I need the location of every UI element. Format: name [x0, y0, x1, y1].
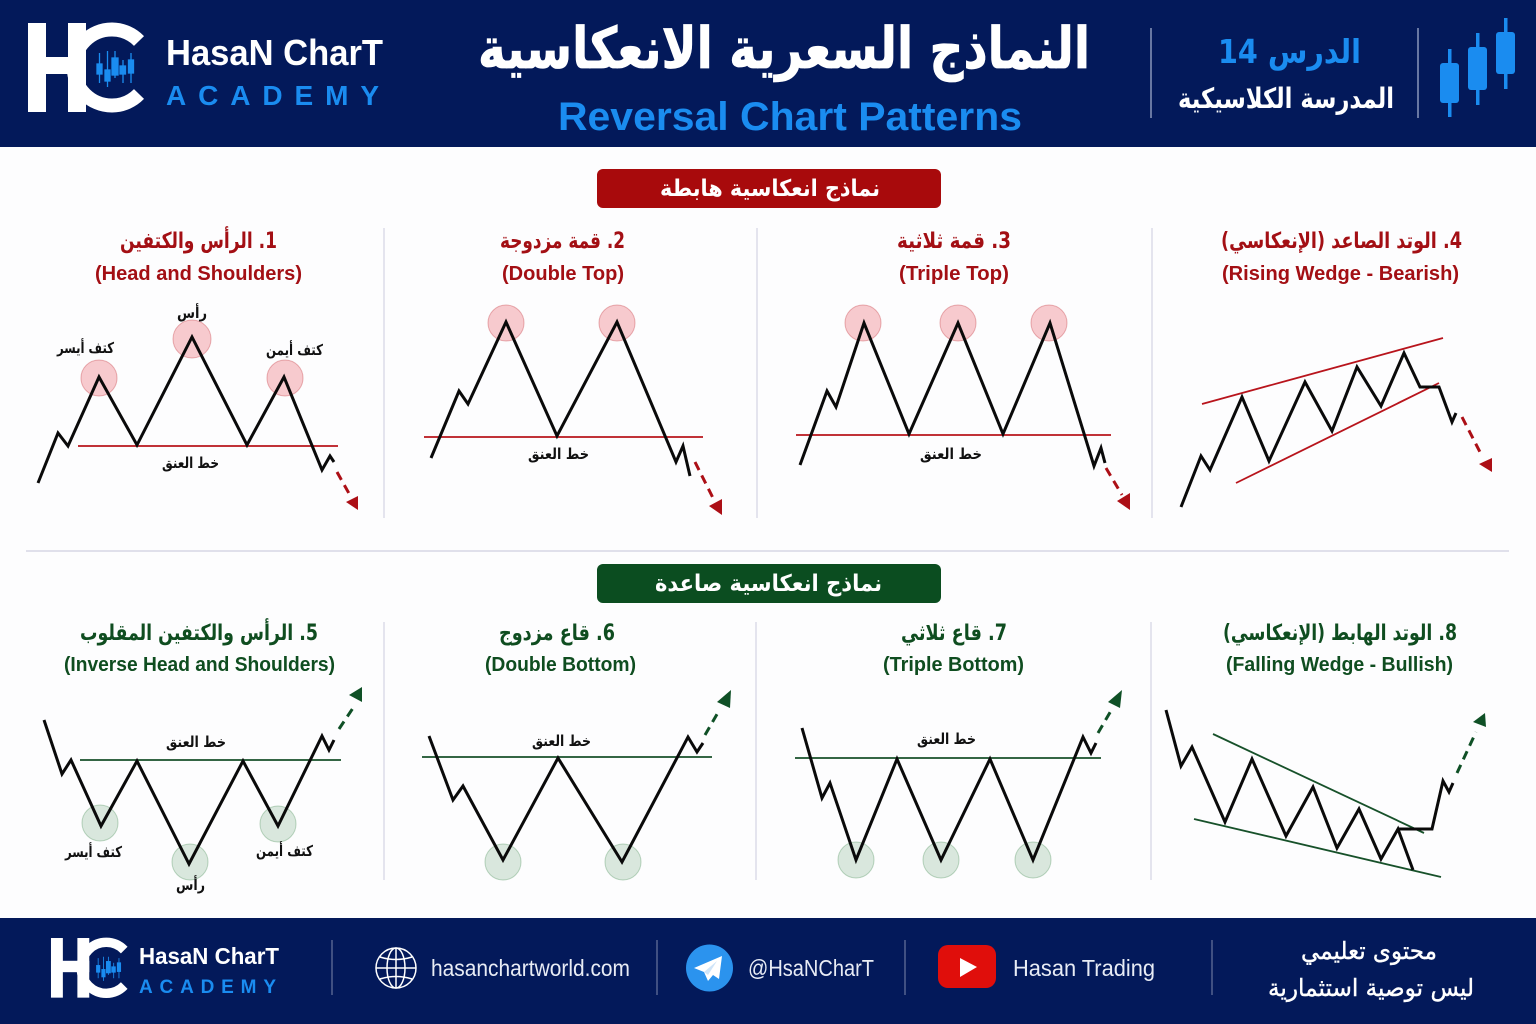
lesson block: [1178, 32, 1394, 115]
heading: pattern 7: (Triple Bottom): [883, 654, 1024, 676]
heading: pattern 2: [500, 229, 625, 285]
heading: pattern 7: [883, 621, 1024, 676]
chart: triple bottom: خط العنق: [917, 730, 976, 748]
panel: triple top: [796, 229, 1130, 510]
youtube channel name: Hasan Trading: [1013, 955, 1155, 981]
heading: pattern 5: (Inverse Head and Shoulders): [64, 654, 335, 676]
chart: triple top: خط العنق: [920, 445, 982, 463]
footer logo mark: [51, 938, 124, 998]
footer wordmark: [139, 943, 279, 998]
panel: inverse head and shoulders: [44, 617, 362, 894]
chart: falling wedge: [1166, 710, 1486, 877]
heading: pattern 6: 6. قاع مزدوج: [499, 621, 615, 646]
footer wordmark: ACADEMY: [139, 977, 276, 998]
icon: rising candles: [1440, 18, 1515, 117]
heading: pattern 8: (Falling Wedge - Bullish): [1226, 654, 1453, 676]
heading: pattern 7: 7. قاع ثلاثي: [901, 621, 1007, 646]
icon: youtube: [938, 945, 996, 988]
heading: pattern 5: 5. الرأس والكتفين المقلوب: [80, 617, 318, 646]
heading: pattern 4: [1221, 229, 1462, 285]
panel: triple bottom: [795, 621, 1122, 878]
website text: hasanchartworld.com: [431, 955, 630, 981]
heading: pattern 4: (Rising Wedge - Bearish): [1222, 263, 1459, 285]
lesson block: المدرسة الكلاسيكية: [1178, 82, 1394, 115]
header band: [0, 0, 1536, 147]
disclaimer: محتوى تعليمي: [1301, 937, 1437, 965]
chart: triple top: [796, 305, 1130, 510]
heading: pattern 1: 1. الرأس والكتفين: [120, 225, 277, 254]
bullish section banner: نماذج انعكاسية صاعدة: [655, 571, 882, 597]
icon: globe: [376, 948, 416, 988]
chart: rising wedge: [1181, 338, 1492, 507]
chart: double top: خط العنق: [528, 445, 589, 463]
chart: double top: [424, 305, 722, 515]
heading: pattern 5: [64, 617, 335, 676]
heading: pattern 1: (Head and Shoulders): [95, 263, 302, 285]
chart: inverse head and shoulders: خط العنق: [166, 733, 226, 751]
telegram handle: @HsaNCharT: [748, 955, 874, 981]
title: Reversal Chart Patterns: [558, 95, 1022, 139]
chart: head and shoulders: [38, 303, 358, 510]
logo wordmark: HasaN CharT: [166, 32, 383, 73]
logo wordmark: ACADEMY: [166, 80, 379, 111]
bearish section banner: [597, 169, 941, 208]
title: [478, 16, 1090, 139]
chart: head and shoulders: كتف أيسر: [56, 338, 114, 357]
lesson block: الدرس 14: [1218, 32, 1361, 71]
logo wordmark: [166, 32, 383, 111]
heading: pattern 6: [485, 621, 636, 676]
panel: double bottom: [422, 621, 731, 880]
chart: inverse head and shoulders: كتف أيمن: [256, 841, 313, 860]
footer band: [0, 918, 1536, 1024]
logo mark: HC: [28, 23, 139, 112]
panel: head and shoulders: [38, 225, 358, 510]
bearish section banner: نماذج انعكاسية هابطة: [660, 176, 880, 202]
heading: pattern 3: (Triple Top): [899, 263, 1009, 285]
panel: double top: [424, 229, 722, 515]
heading: pattern 3: 3. قمة ثلاثية: [897, 229, 1011, 254]
heading: pattern 1: [95, 225, 302, 285]
disclaimer: [1268, 937, 1474, 1002]
disclaimer: ليس توصية استثمارية: [1268, 974, 1474, 1002]
heading: pattern 4: 4. الوتد الصاعد (الإنعكاسي): [1221, 229, 1462, 254]
heading: pattern 8: [1223, 621, 1457, 676]
heading: pattern 6: (Double Bottom): [485, 654, 636, 676]
heading: pattern 8: 8. الوتد الهابط (الإنعكاسي): [1223, 621, 1457, 646]
chart: head and shoulders: رأس: [177, 303, 207, 322]
chart: inverse head and shoulders: [44, 687, 362, 894]
chart: head and shoulders: كتف أيمن: [266, 340, 323, 359]
heading: pattern 2: 2. قمة مزدوجة: [500, 229, 625, 254]
heading: pattern 3: [897, 229, 1011, 285]
chart: inverse head and shoulders: كتف أيسر: [64, 842, 122, 861]
chart: head and shoulders: خط العنق: [162, 454, 219, 472]
panel: rising wedge: [1181, 229, 1492, 507]
chart: triple bottom: [795, 690, 1122, 878]
chart: double bottom: خط العنق: [532, 732, 591, 750]
chart: inverse head and shoulders: رأس: [176, 875, 205, 894]
panel: falling wedge: [1166, 621, 1486, 877]
icon: telegram: [686, 944, 733, 992]
title: النماذج السعرية الانعكاسية: [478, 16, 1090, 82]
footer wordmark: HasaN CharT: [139, 943, 279, 969]
heading: pattern 2: (Double Top): [502, 263, 624, 285]
bullish section banner: [597, 564, 941, 603]
chart: double bottom: [422, 690, 731, 880]
